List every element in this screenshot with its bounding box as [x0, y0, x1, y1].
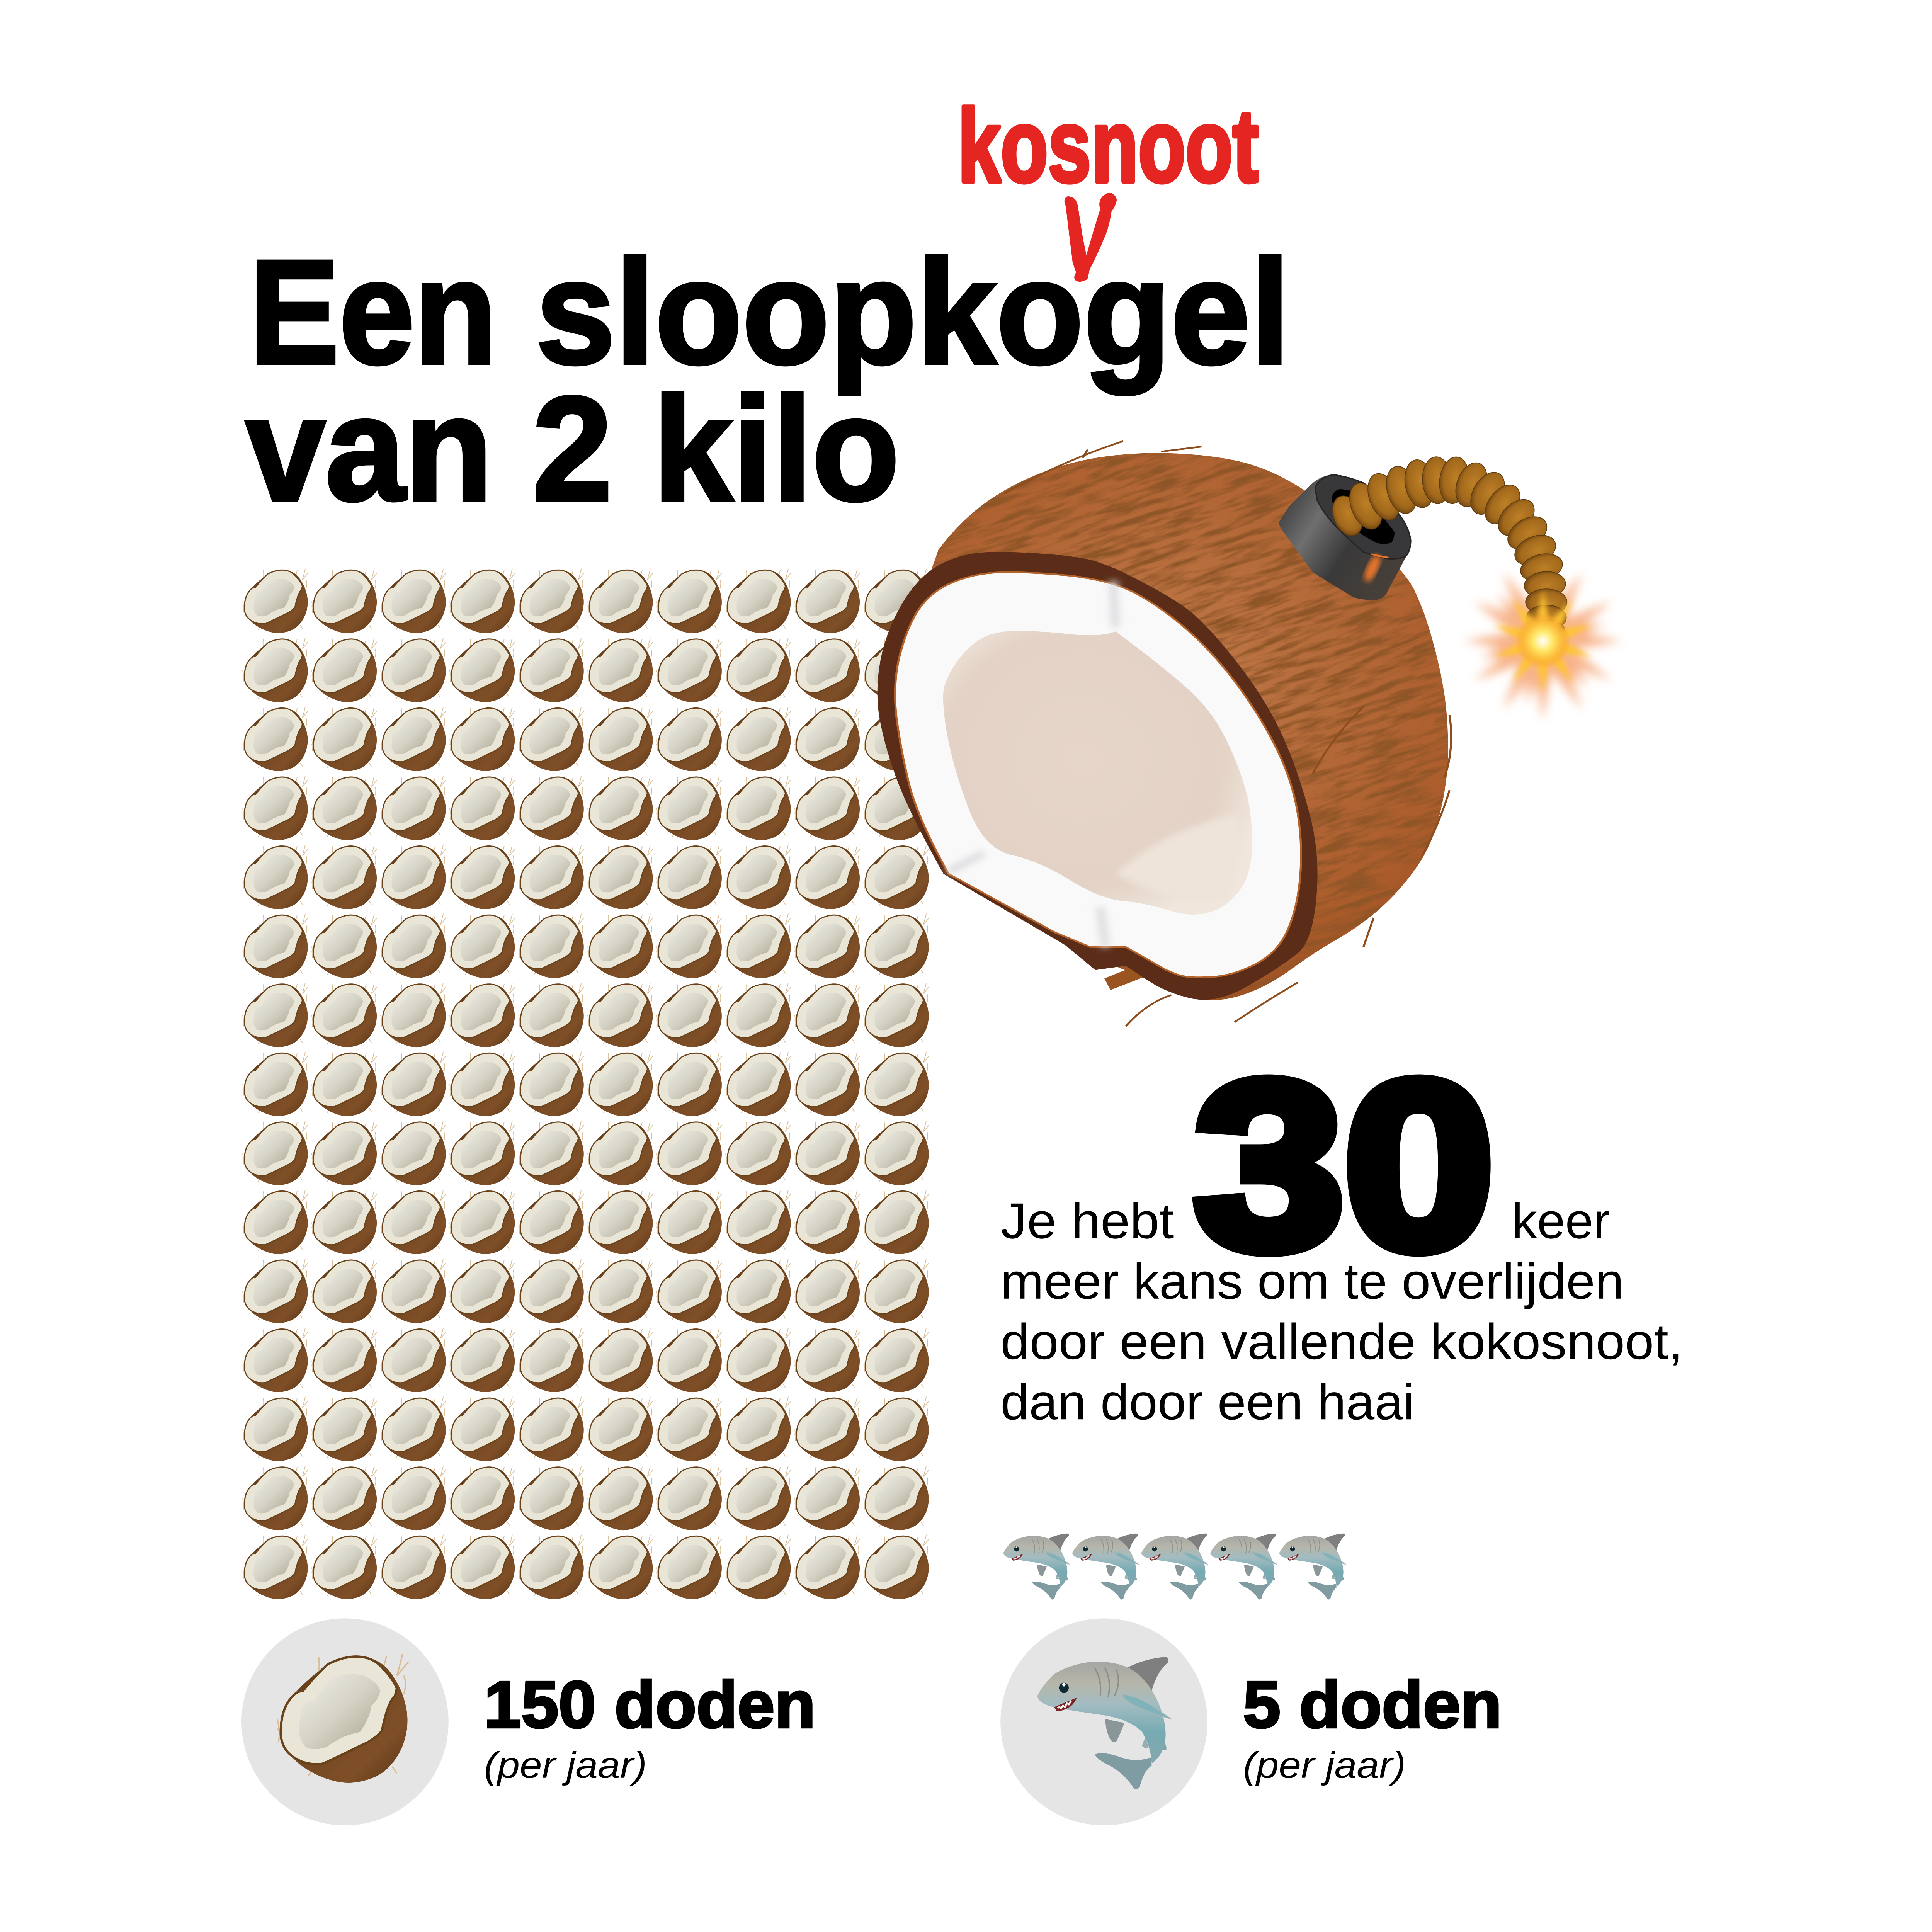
icon: spark glow — [1464, 562, 1622, 720]
icon: coconut in grey circle — [242, 1618, 449, 1825]
statement text: meer kans om te overlijden — [1000, 1253, 1624, 1310]
icon: rope fuse — [1327, 455, 1567, 642]
statement text — [1000, 1192, 1683, 1430]
title: 2 — [532, 366, 612, 532]
label: per jaar: (per jaar) — [484, 1745, 647, 1786]
bomb cap — [1279, 475, 1411, 600]
illustration: coconut bomb — [573, 217, 1778, 1235]
legend: coconut — [242, 1618, 816, 1825]
icon: insertion caret — [1064, 193, 1117, 282]
statement text: dan door een haai — [1000, 1374, 1415, 1430]
coconut grid: 150 deaths — [243, 569, 929, 1599]
label: per jaar: (per jaar) — [1243, 1745, 1406, 1786]
label: 150 doden: 150 doden — [484, 1668, 816, 1742]
legend: shark — [1000, 1618, 1502, 1825]
icon: shark in grey circle — [1000, 1618, 1208, 1825]
statement text: door een vallende kokosnoot, — [1000, 1313, 1683, 1370]
title: sloopkogel — [536, 229, 1290, 396]
coconut inner meat — [943, 631, 1252, 915]
big number: 30: 30 — [1194, 1032, 1494, 1298]
title: kilo — [653, 366, 900, 532]
coconut white flesh — [895, 572, 1301, 977]
handwritten correction: kosnoot: kosnoot — [958, 88, 1259, 204]
spark core — [1491, 589, 1595, 693]
shark row: 5 deaths — [1003, 1534, 1346, 1600]
title: Een — [249, 229, 497, 395]
title: van — [246, 366, 493, 532]
coconut shell rim — [878, 552, 1318, 1000]
coconut husk — [573, 217, 1778, 1235]
statement text: keer — [1512, 1192, 1610, 1249]
statement text: Je hebt — [1000, 1192, 1174, 1249]
title — [246, 229, 1290, 532]
coconut fibres — [1004, 441, 1451, 1026]
handwritten correction: kosnoot — [958, 88, 1259, 282]
label: 5 doden: 5 doden — [1243, 1668, 1502, 1742]
